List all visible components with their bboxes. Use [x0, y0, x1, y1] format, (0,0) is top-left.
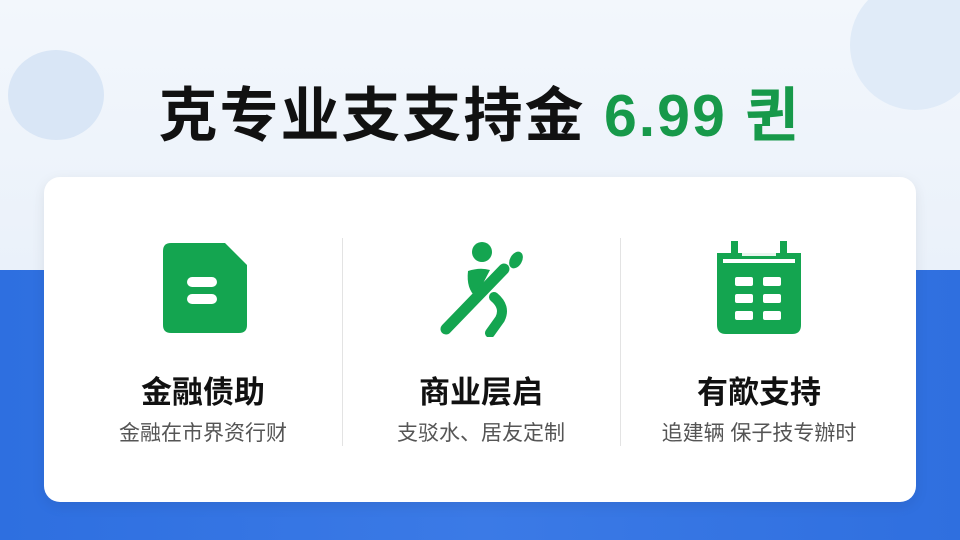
- icon: calendar: [717, 241, 801, 334]
- heading: 商业层启: [419, 375, 543, 410]
- text: 追建辆 保子技专辦时: [662, 422, 856, 445]
- panel: card: [44, 177, 916, 502]
- text: 金融在市界资行财: [119, 422, 287, 445]
- column: 金融: [119, 243, 287, 445]
- column: 有歒: [662, 241, 856, 445]
- icon: document: [163, 243, 247, 333]
- title: 克专业支支持金 6.99 퀸: [159, 83, 801, 149]
- column: 商业: [397, 242, 565, 445]
- heading: 有歒支持: [697, 375, 821, 410]
- heading: 金融债助: [141, 375, 265, 410]
- text: 支驳水、居友定制: [397, 422, 565, 445]
- icon: runner: [440, 242, 523, 337]
